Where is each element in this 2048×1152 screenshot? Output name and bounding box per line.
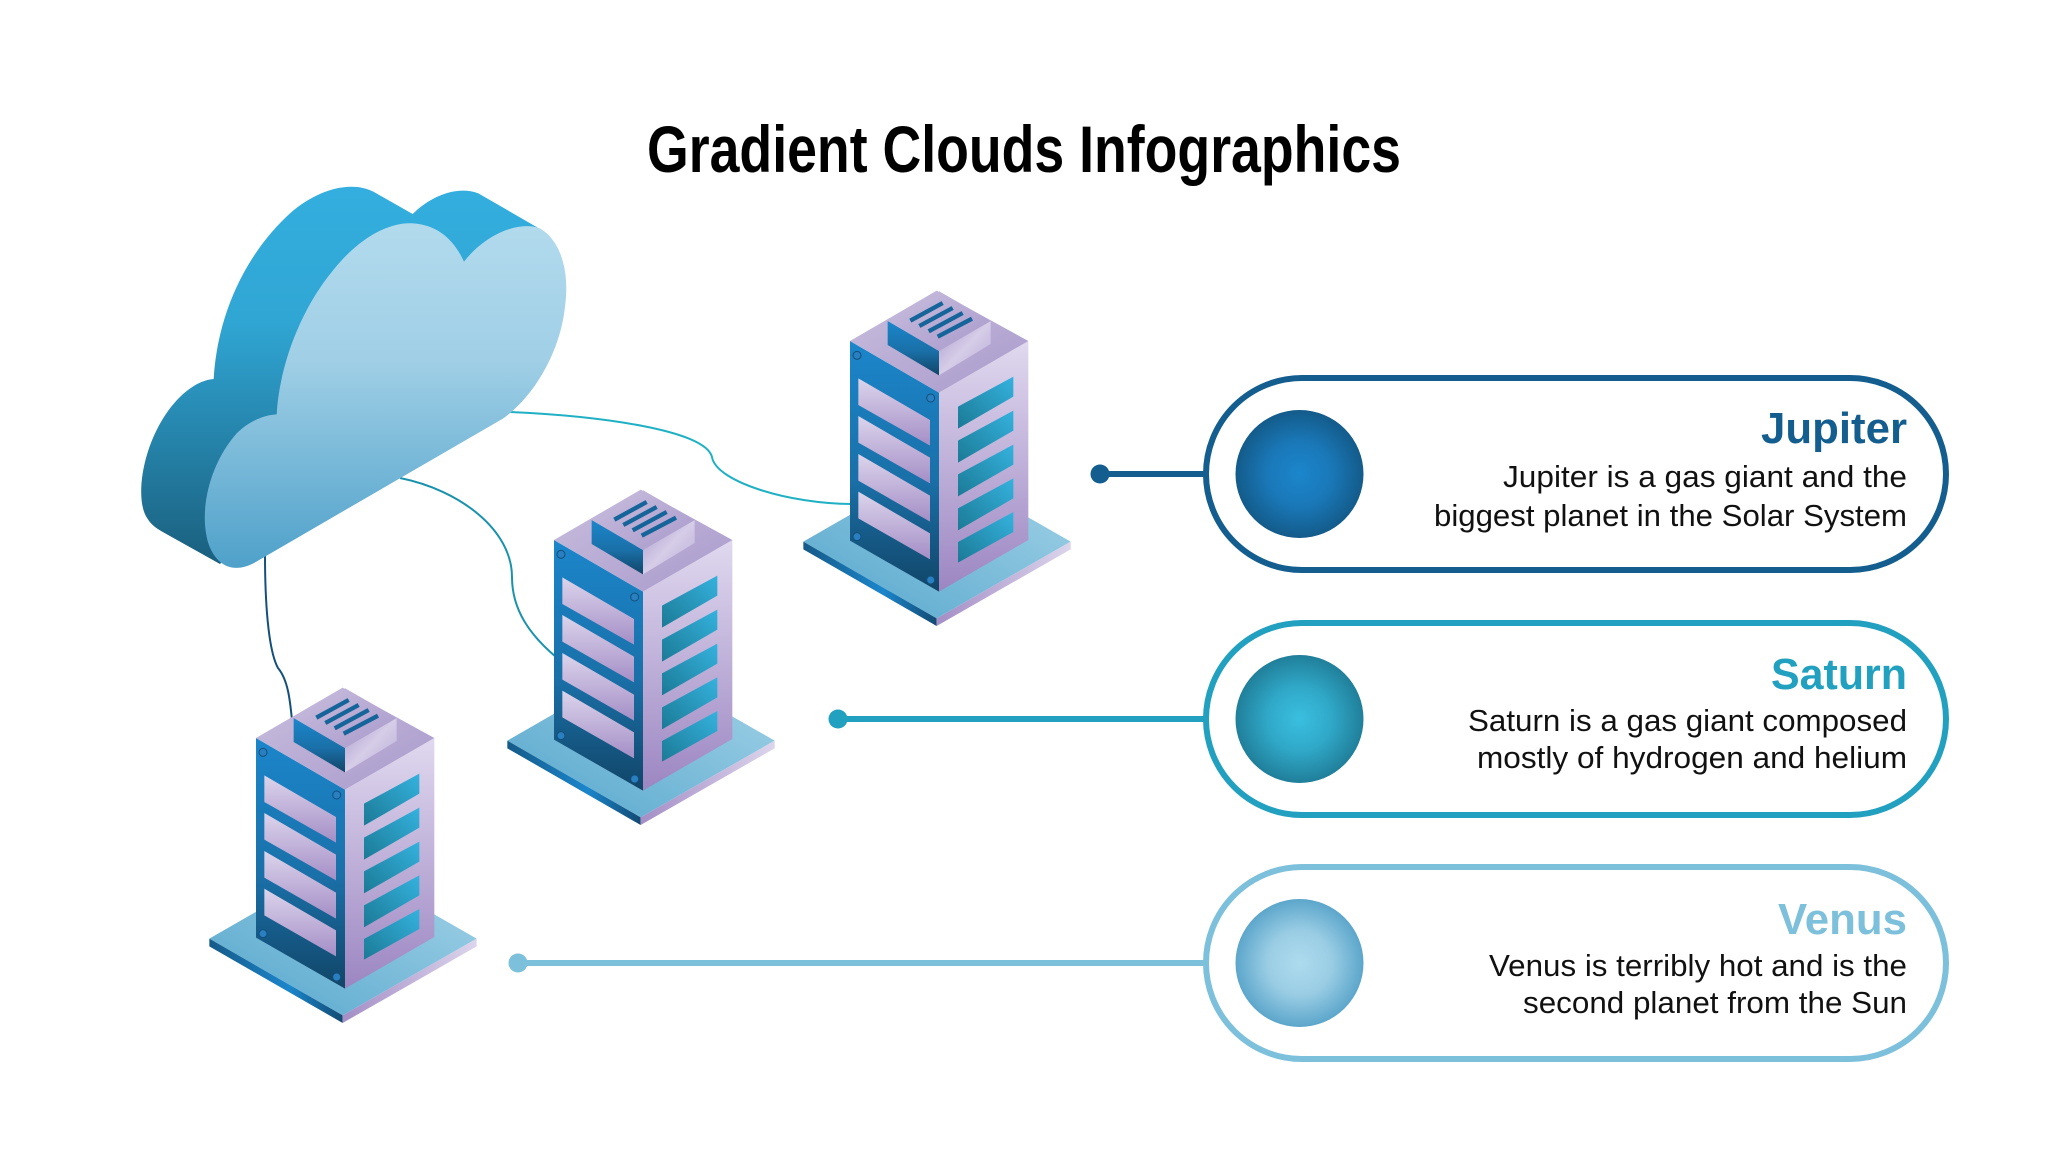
building 1 — [803, 291, 1071, 626]
Saturn description: mostly of hydrogen and helium — [1477, 740, 1907, 775]
Jupiter heading: Jupiter — [1761, 404, 1907, 453]
connector dot and line: Venus — [508, 954, 1206, 972]
title: Gradient Clouds Infographics — [647, 112, 1401, 186]
Jupiter description: Jupiter is a gas giant and the — [1503, 459, 1907, 494]
building 2 — [507, 490, 775, 825]
panel: Jupiter — [1206, 378, 1946, 570]
Jupiter planet circle — [1236, 410, 1364, 538]
Venus description: Venus is terribly hot and is the — [1489, 948, 1907, 983]
building 3 — [209, 688, 477, 1023]
Venus description — [1489, 948, 1907, 1020]
Venus pill outline — [1206, 867, 1946, 1059]
Jupiter pill outline — [1206, 378, 1946, 570]
Venus description: second planet from the Sun — [1523, 985, 1907, 1020]
Venus heading: Venus — [1778, 895, 1907, 944]
Venus planet circle — [1236, 899, 1364, 1027]
Saturn planet circle — [1236, 655, 1364, 783]
connector: cloud to building 1 — [510, 412, 852, 504]
panel: Venus — [1206, 867, 1946, 1059]
cloud front face — [205, 223, 566, 568]
Saturn pill outline — [1206, 623, 1946, 815]
Saturn description — [1468, 703, 1907, 775]
connector dot and line: Saturn — [828, 710, 1206, 728]
Saturn description: Saturn is a gas giant composed — [1468, 703, 1907, 738]
connector: cloud to building 3 — [265, 555, 292, 720]
connector dot and line: Jupiter — [1090, 464, 1206, 484]
cloud icon — [141, 187, 566, 568]
connector: cloud to building 2 — [400, 478, 556, 657]
cloud side extrusion — [141, 187, 541, 564]
Saturn heading: Saturn — [1771, 650, 1907, 699]
Jupiter description — [1434, 459, 1907, 533]
Jupiter description: biggest planet in the Solar System — [1434, 498, 1907, 533]
panel: Saturn — [1206, 623, 1946, 815]
